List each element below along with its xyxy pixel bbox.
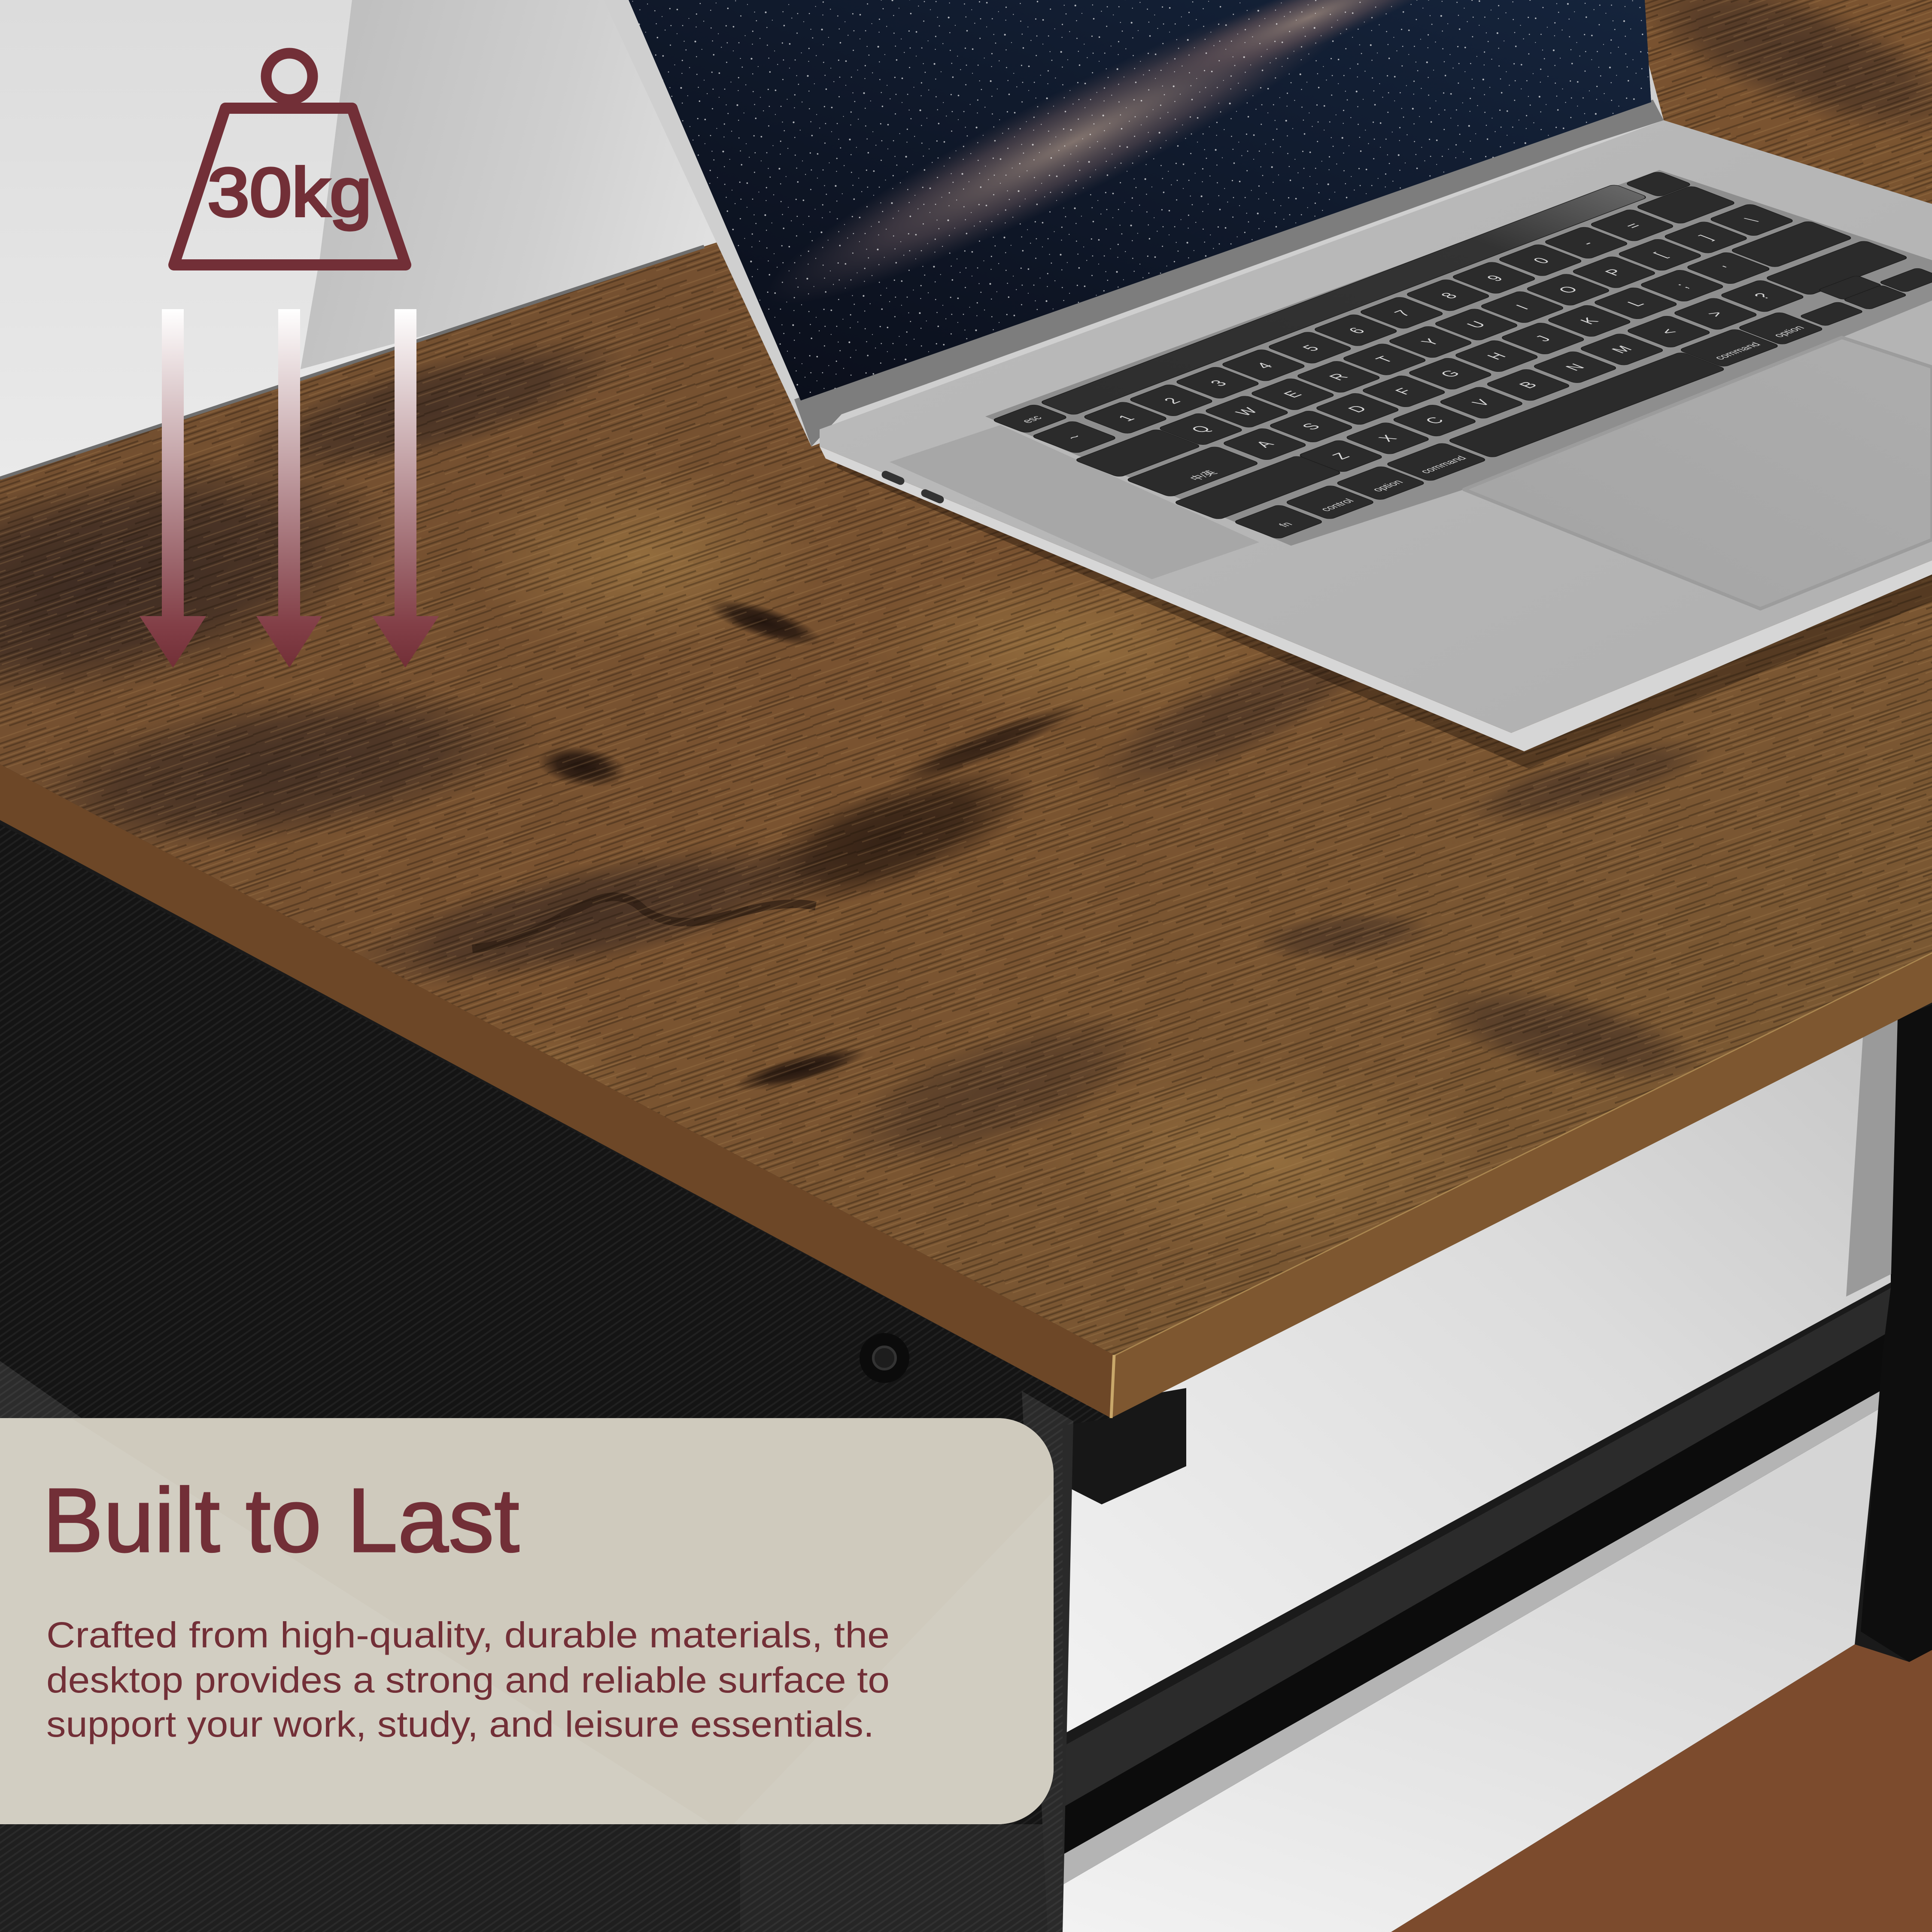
- keyboard keys: F: [1391, 386, 1417, 396]
- wall skirting shadow line: [0, 246, 704, 478]
- keyboard keys: Q: [1187, 424, 1215, 434]
- baseboard: [1063, 1385, 1891, 1932]
- desktop wood surface: [0, 0, 1932, 1417]
- lower black shelf rail: [1063, 1288, 1891, 1855]
- keyboard well: [985, 170, 1932, 546]
- laptop: [601, 0, 1932, 751]
- keyboard keys: 9: [1482, 273, 1507, 283]
- keyboard keys: control: [1318, 498, 1357, 513]
- keyboard keys: \: [1741, 216, 1762, 224]
- white cabinet panel behind desk: [1063, 1005, 1891, 1735]
- trackpad: [1464, 337, 1932, 609]
- keyboard keys: option: [1771, 325, 1807, 339]
- drawer rivet: [860, 1333, 909, 1383]
- USB-C ports: [881, 470, 945, 504]
- body text: [46, 1615, 890, 1744]
- body text: support your work, study, and leisure essentials.: [46, 1704, 874, 1744]
- keyboard keys: =: [1620, 221, 1646, 231]
- heading: Built to Last: [43, 1469, 519, 1571]
- body text: desktop provides a strong and reliable surface to: [46, 1660, 890, 1700]
- keyboard keys: B: [1515, 380, 1541, 390]
- laptop hinge strip: [794, 100, 1664, 447]
- keyboard keys: K: [1576, 316, 1603, 326]
- keyboard keys: W: [1231, 406, 1262, 417]
- keyboard keys: 3: [1206, 378, 1231, 388]
- keyboard keys: esc: [1019, 414, 1045, 424]
- arrow 1: [140, 309, 206, 668]
- steel leg: [1861, 1005, 1932, 1662]
- arrow 3: [372, 309, 439, 668]
- keyboard keys: [975, 164, 1932, 541]
- keyboard keys: command: [1711, 341, 1764, 361]
- floor: [1391, 1644, 1932, 1932]
- keyboard keys: fn: [1276, 521, 1295, 529]
- keyboard keys: O: [1554, 284, 1582, 295]
- keyboard keys: ~: [1061, 432, 1087, 442]
- keyboard keys: S: [1297, 422, 1324, 431]
- keyboard keys: Z: [1328, 451, 1354, 461]
- keyboard keys: M: [1607, 344, 1636, 355]
- laptop edge: [820, 447, 1932, 751]
- keyboard keys: option: [1370, 479, 1406, 493]
- keyboard keys: command: [1417, 455, 1470, 475]
- keyboard keys: P: [1601, 267, 1627, 277]
- keyboard keys: 2: [1160, 396, 1185, 406]
- keyboard keys: N: [1561, 362, 1589, 372]
- keyboard keys: 8: [1437, 291, 1461, 301]
- keyboard keys: -: [1576, 239, 1598, 247]
- laptop screen: [629, 0, 1651, 401]
- keyboard keys: G: [1436, 368, 1464, 379]
- fabric drawer: [0, 824, 1111, 1932]
- wall background: [0, 0, 1932, 558]
- keyboard keys: 6: [1344, 326, 1369, 335]
- keyboard keys: X: [1374, 433, 1401, 444]
- keyboard keys: ': [1718, 264, 1738, 272]
- keyboard keys: J: [1531, 334, 1555, 343]
- black mounting bracket: [1066, 1388, 1186, 1504]
- keyboard keys: ;: [1671, 282, 1692, 290]
- keyboard keys: A: [1251, 439, 1278, 449]
- keyboard keys: 0: [1529, 256, 1554, 265]
- speaker grille: [890, 425, 1259, 579]
- keyboard keys: L: [1623, 298, 1648, 308]
- keyboard keys: ?: [1750, 291, 1775, 301]
- keyboard keys: H: [1483, 351, 1510, 361]
- laptop lid: [604, 0, 1664, 447]
- keyboard keys: C: [1421, 415, 1448, 426]
- laptop deck: [820, 120, 1932, 733]
- keyboard keys: ]: [1695, 233, 1716, 241]
- keyboard keys: [: [1649, 251, 1671, 259]
- keyboard keys: I: [1512, 303, 1533, 311]
- weight label: 30kg: [207, 154, 372, 231]
- frame edge strip: [1846, 1013, 1906, 1297]
- keyboard keys: 1: [1114, 413, 1139, 423]
- laptop shadow: [837, 447, 1932, 769]
- keyboard keys: E: [1279, 389, 1306, 399]
- keyboard keys: U: [1462, 319, 1490, 330]
- keyboard keys: T: [1371, 355, 1397, 365]
- keyboard keys: 中/英: [1187, 469, 1220, 482]
- load arrows: [140, 309, 439, 668]
- keyboard keys: R: [1325, 371, 1352, 382]
- desk front edge: [0, 764, 1932, 1418]
- icon: 30kg weight: [174, 53, 406, 265]
- keyboard keys: V: [1468, 398, 1495, 408]
- panel: built to last: [0, 1418, 1054, 1824]
- keyboard keys: Y: [1417, 337, 1444, 347]
- arrow 2: [256, 309, 322, 668]
- keyboard keys: D: [1344, 404, 1371, 414]
- keyboard keys: >: [1703, 309, 1728, 319]
- keyboard keys: 7: [1390, 308, 1415, 318]
- keyboard keys: 5: [1298, 343, 1323, 353]
- body text: Crafted from high-quality, durable materials, the: [46, 1615, 890, 1655]
- keyboard keys: <: [1656, 327, 1681, 337]
- keyboard keys: 4: [1252, 361, 1277, 371]
